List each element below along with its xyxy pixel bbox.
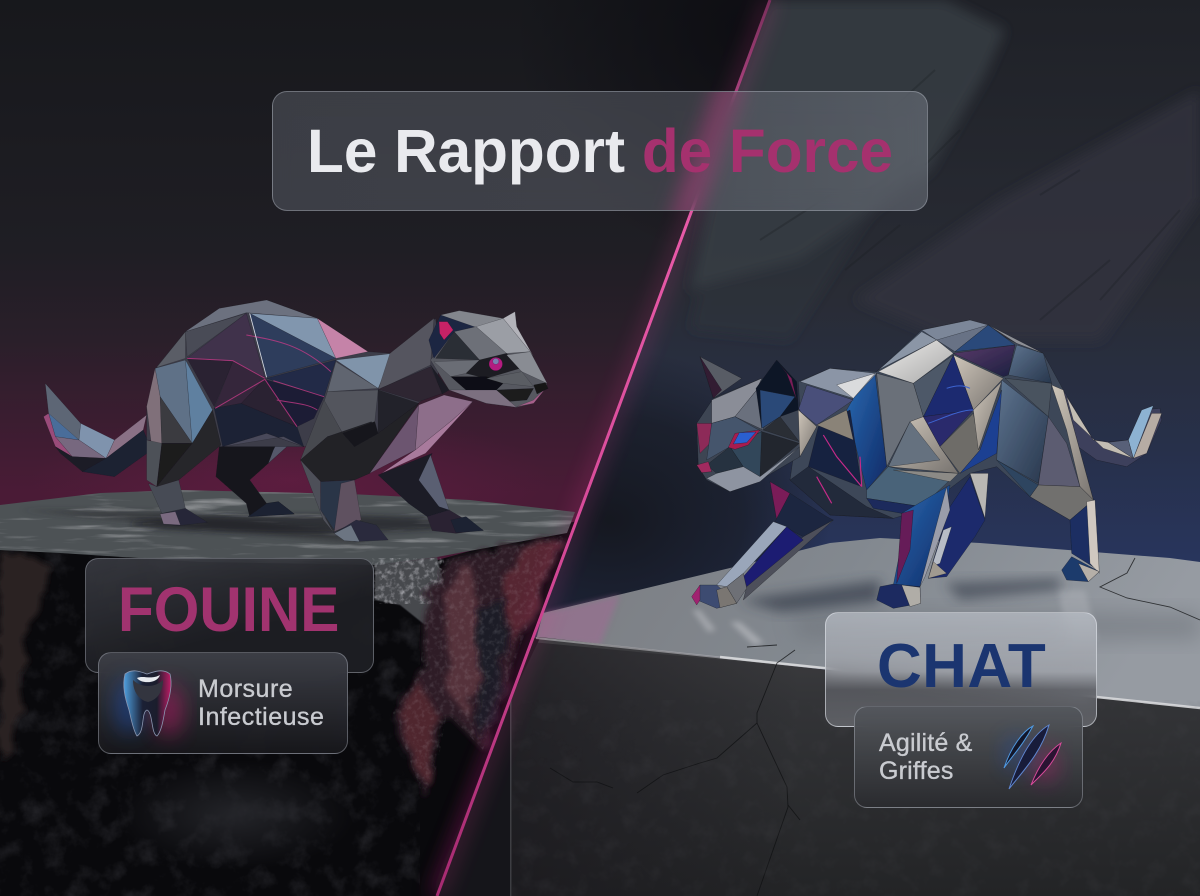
panel: CHAT — [825, 612, 1097, 727]
icon: tooth — [105, 670, 194, 744]
ferret far legs — [216, 437, 294, 517]
ferret rear leg — [147, 410, 221, 526]
cat front right leg — [877, 485, 950, 608]
cat body — [790, 320, 1093, 520]
panel: agility ability — [854, 706, 1083, 808]
ferret body — [147, 300, 441, 447]
title panel — [272, 91, 928, 211]
ability text — [878, 729, 973, 785]
cat tail — [1063, 390, 1162, 467]
panel: FOUINE — [85, 558, 374, 673]
ferret nose — [534, 383, 548, 394]
ferret eye — [489, 357, 503, 371]
cat rear leg — [1062, 500, 1099, 582]
ferret tail — [44, 383, 152, 477]
ability text: Morsure — [198, 675, 293, 703]
cat illustration — [692, 320, 1162, 608]
ability text: Agilité & — [879, 729, 973, 757]
icon: claw marks — [998, 724, 1065, 790]
ferret front legs — [300, 453, 484, 542]
ability text — [198, 675, 324, 731]
wall brush strokes — [690, 0, 1200, 340]
rock ledge — [0, 485, 600, 896]
glowing diagonal divider — [437, 0, 770, 896]
title text: Le Rapport de Force — [307, 117, 893, 185]
cat head — [697, 357, 817, 492]
panel: bite ability — [98, 652, 348, 754]
ferret illustration — [44, 300, 548, 542]
FOUINE label: FOUINE — [118, 575, 339, 645]
ferret head — [429, 311, 547, 407]
ferret chest — [300, 318, 473, 482]
marble table — [430, 538, 1200, 896]
CHAT label: CHAT — [877, 632, 1046, 701]
animal shadows — [130, 515, 1060, 612]
ability text: Infectieuse — [198, 703, 324, 731]
cat front left leg — [692, 482, 833, 608]
cat far leg — [928, 473, 988, 578]
ability text: Griffes — [879, 757, 954, 785]
ferret ear — [439, 322, 453, 340]
